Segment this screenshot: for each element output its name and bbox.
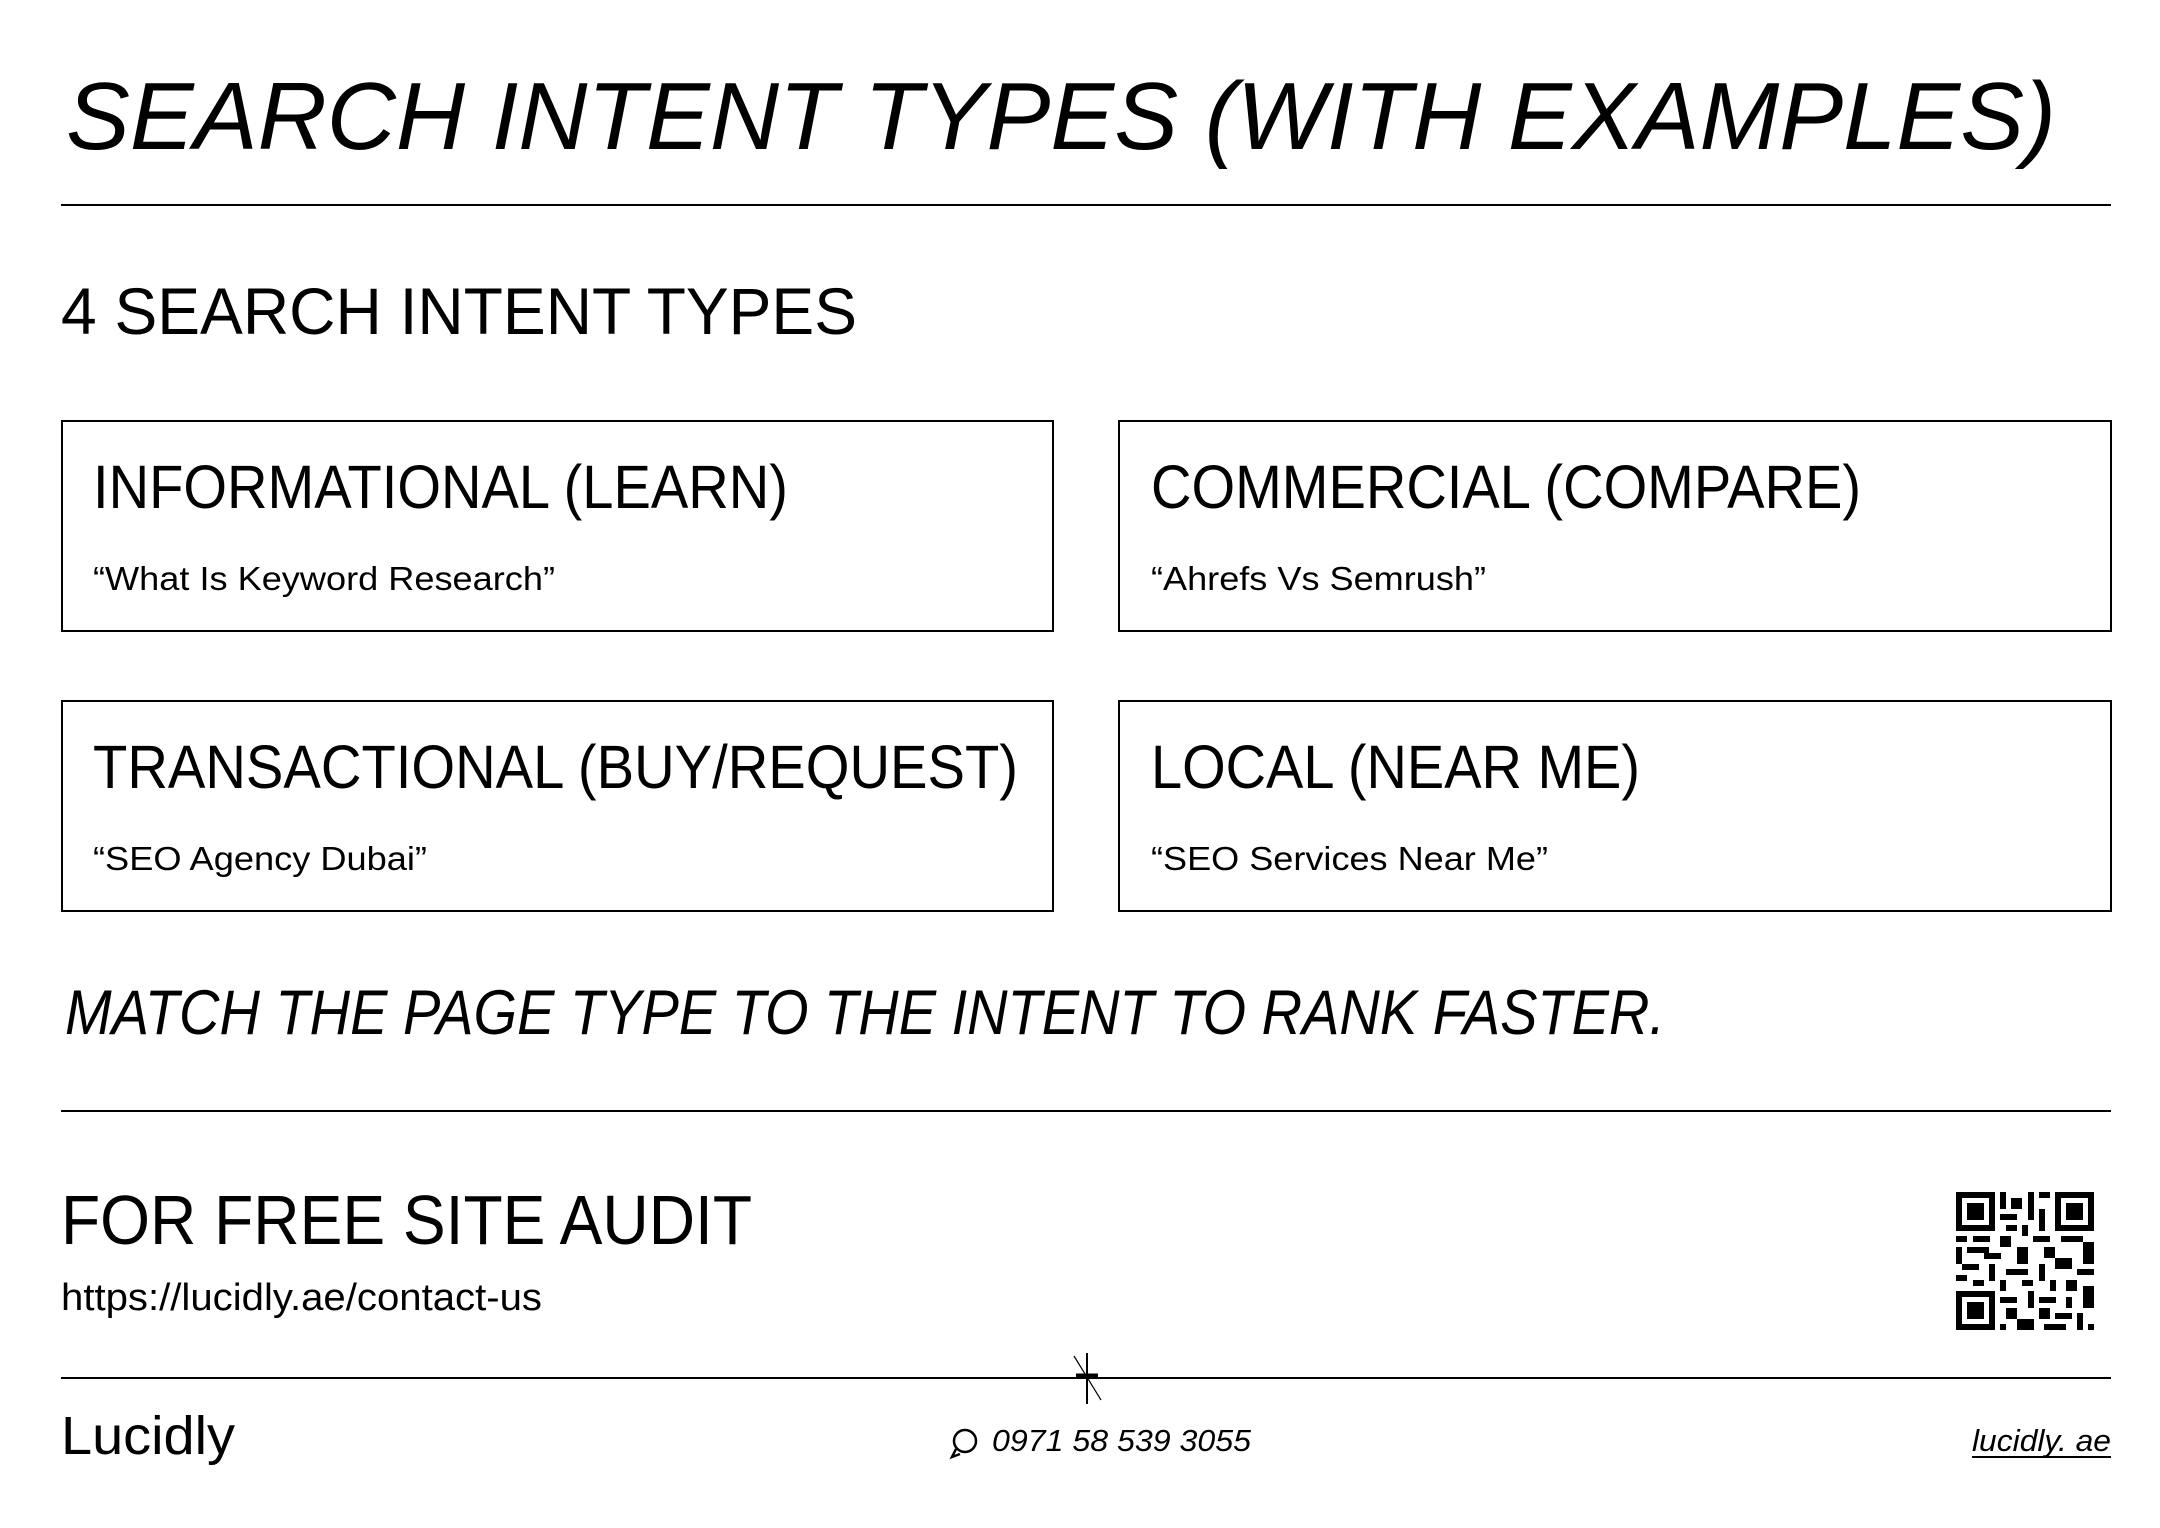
phone contact: 0971 58 539 3055 <box>992 1423 1252 1458</box>
panel: local <box>1119 701 2111 911</box>
panel: local: LOCAL (NEAR ME) <box>1151 733 1640 801</box>
panel: commercial: COMMERCIAL (COMPARE) <box>1151 453 1861 521</box>
panel: informational: INFORMATIONAL (LEARN) <box>93 453 788 521</box>
subheading: 4 SEARCH INTENT TYPES <box>61 274 857 348</box>
cta heading: FOR FREE SITE AUDIT <box>61 1181 752 1259</box>
panel: commercial: “Ahrefs Vs Semrush” <box>1151 560 1486 597</box>
title: SEARCH INTENT TYPES (WITH EXAMPLES) <box>66 63 2056 170</box>
panel: transactional: “SEO Agency Dubai” <box>93 840 427 877</box>
panel: transactional <box>62 701 1053 911</box>
icon: sparkle cross <box>1074 1353 1101 1404</box>
cta url: https://lucidly.ae/contact-us <box>61 1277 542 1319</box>
icon: whatsapp <box>952 1430 976 1457</box>
panel: informational: “What Is Keyword Research” <box>93 560 555 597</box>
panel: commercial <box>1119 421 2111 631</box>
panel: local: “SEO Services Near Me” <box>1151 840 1548 877</box>
icon: qr code <box>1956 1192 2094 1330</box>
logo: Lucidly <box>61 1406 235 1466</box>
panel: informational <box>62 421 1053 631</box>
website link: lucidly. ae <box>1972 1423 2111 1458</box>
tagline: MATCH THE PAGE TYPE TO THE INTENT TO RANK FASTER. <box>65 978 1665 1048</box>
panel: transactional: TRANSACTIONAL (BUY/REQUEST) <box>93 733 1018 801</box>
